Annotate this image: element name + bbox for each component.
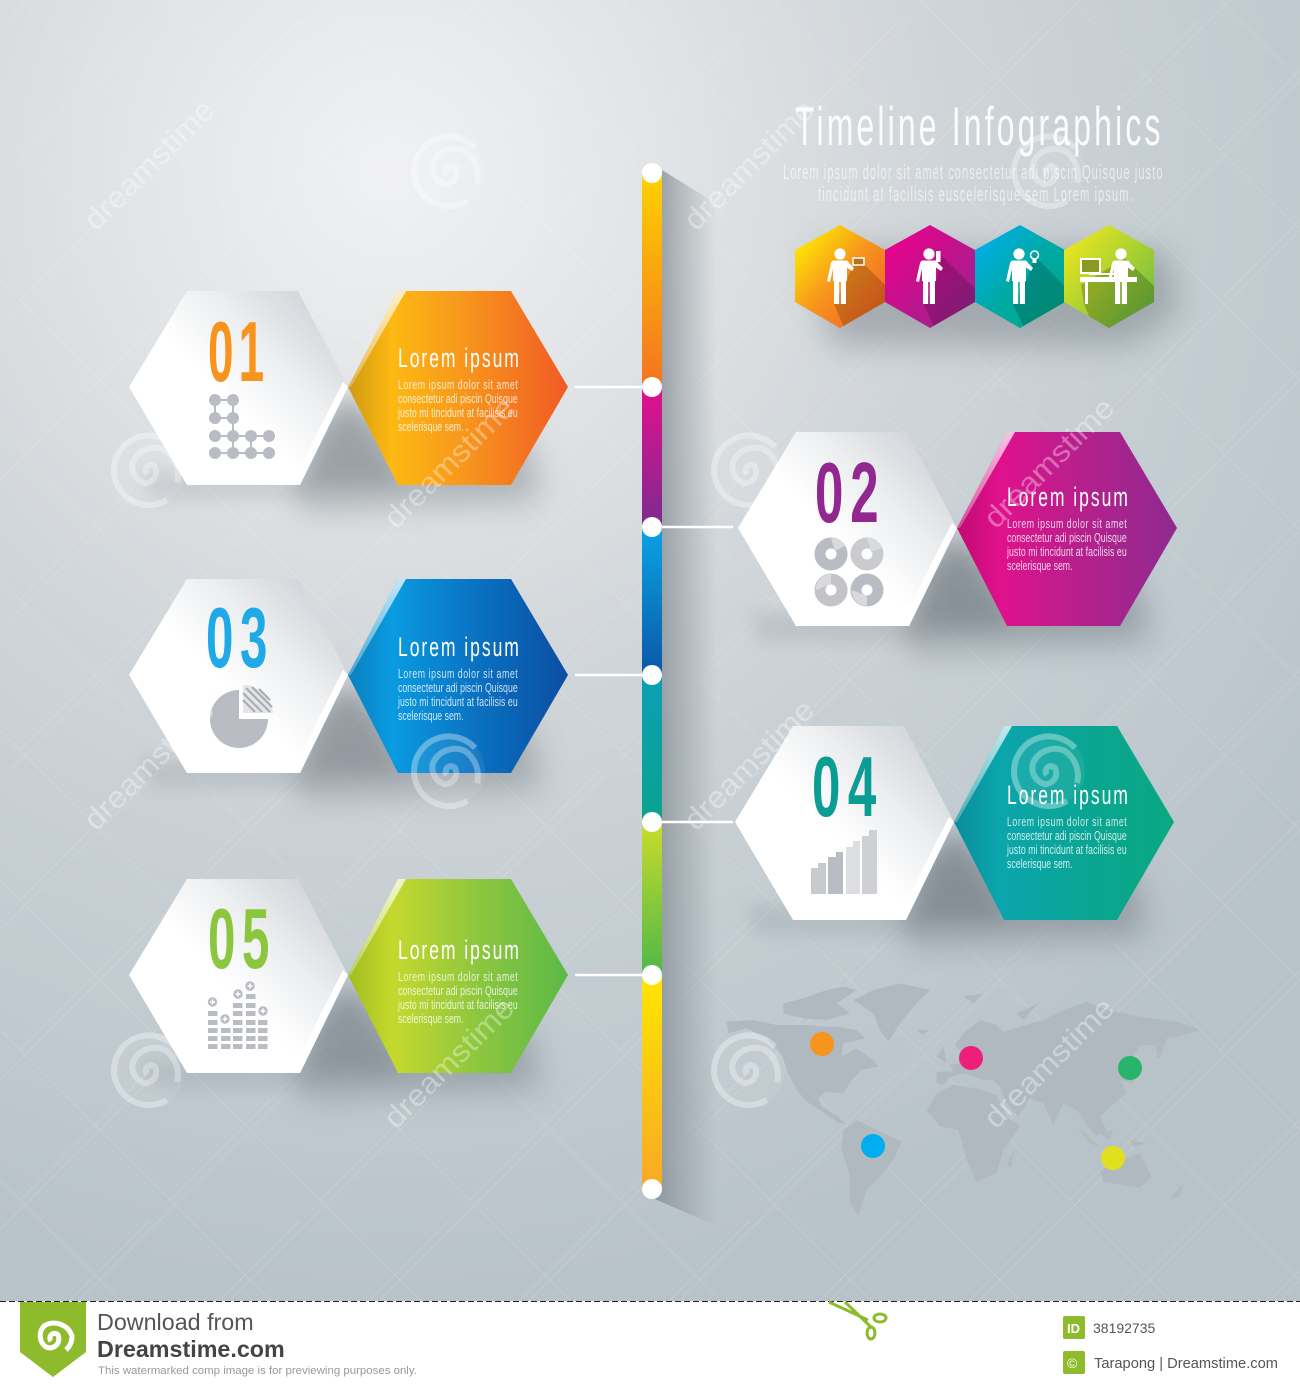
footer download text xyxy=(97,1309,417,1377)
step number 02: 02 xyxy=(815,446,879,540)
icon: rising step bars xyxy=(811,830,877,894)
step 01 text: consectetur adi piscin Quisque xyxy=(398,393,518,406)
step 05 text: justo mi tincidunt at facilisis eu xyxy=(397,999,518,1012)
title: Timeline Infographics xyxy=(795,95,1160,157)
step 02 text: Lorem ipsum dolor sit amet xyxy=(1007,518,1127,531)
icon: green ribbon logo xyxy=(20,1302,86,1377)
id badge and number xyxy=(1063,1316,1156,1339)
author badge and credit: © xyxy=(1067,1355,1078,1371)
panel: step 01 xyxy=(129,291,568,485)
step 05 text xyxy=(397,934,519,1026)
step 03 text: Lorem ipsum dolor sit amet xyxy=(398,668,518,681)
step number 03: 03 xyxy=(206,590,267,685)
footer download text: This watermarked comp image is for previewing purposes only. xyxy=(98,1365,417,1377)
id badge and number: ID xyxy=(1067,1321,1080,1336)
watermarks: dreamstime xyxy=(678,93,821,237)
step 04 text: Lorem ipsum xyxy=(1007,779,1128,810)
step 02 text xyxy=(1006,481,1128,573)
author badge and credit xyxy=(1063,1351,1278,1374)
step 04 text: Lorem ipsum dolor sit amet xyxy=(1007,816,1127,829)
small hexagon row shadow xyxy=(810,250,1180,345)
id badge and number: 38192735 xyxy=(1093,1320,1156,1336)
intro text: tincidunt at facilisis euscelerisque sem Lorem ipsum. xyxy=(818,184,1133,206)
step 05 text: scelerisque sem. xyxy=(398,1013,464,1026)
step 03 text: justo mi tincidunt at facilisis eu xyxy=(397,696,518,709)
icon: pie chart xyxy=(210,685,273,748)
step 03 text xyxy=(397,631,519,723)
step 04 text: scelerisque sem. xyxy=(1007,858,1073,871)
intro text: Lorem ipsum dolor sit amet consectetur adi piscin Quisque justo xyxy=(783,162,1163,184)
step 01 text: Lorem ipsum dolor sit amet xyxy=(398,379,518,392)
step 04 text: consectetur adi piscin Quisque xyxy=(1007,830,1127,843)
timeline cast shadow xyxy=(650,170,717,1226)
map markers xyxy=(810,1032,1142,1170)
panel: step 04 xyxy=(735,726,1174,920)
step 02 text: scelerisque sem. xyxy=(1007,560,1073,573)
step 01 text: justo mi tincidunt at facilisis eu xyxy=(397,407,518,420)
step 04 text xyxy=(1006,779,1128,871)
step 02 text: consectetur adi piscin Quisque xyxy=(1007,532,1127,545)
icon: person with laptop xyxy=(795,225,890,330)
footer band xyxy=(0,1301,1300,1390)
step 02 text: Lorem ipsum xyxy=(1007,481,1128,512)
vertical timeline bar xyxy=(642,163,662,1199)
footer download text: Dreamstime.com xyxy=(97,1336,285,1362)
step number 05: 05 xyxy=(208,891,269,986)
panel: step 03 xyxy=(129,579,568,773)
icon: network of nodes xyxy=(210,395,274,458)
watermarks: dreamstime xyxy=(78,93,221,237)
step 03 text: consectetur adi piscin Quisque xyxy=(398,682,518,695)
watermarks: dreamstime xyxy=(678,693,821,837)
author badge and credit: Tarapong | Dreamstime.com xyxy=(1094,1355,1278,1372)
step 03 text: scelerisque sem. xyxy=(398,710,464,723)
intro text xyxy=(783,162,1163,206)
step 05 text: Lorem ipsum dolor sit amet xyxy=(398,971,518,984)
icon: person with light bulb xyxy=(975,225,1070,330)
icon: scissors xyxy=(829,1302,886,1339)
step shadows xyxy=(140,395,1149,1098)
step 05 text: Lorem ipsum xyxy=(398,934,519,965)
icon row: four people hexagons xyxy=(795,225,1160,330)
panel: step 05 xyxy=(129,879,568,1073)
step 03 text: Lorem ipsum xyxy=(398,631,519,662)
step 01 text: Lorem ipsum xyxy=(398,342,519,373)
icon: person on phone xyxy=(885,225,980,330)
icon: person at desk xyxy=(1064,225,1160,330)
watermarks: dreamstime xyxy=(378,991,521,1135)
watermarks xyxy=(78,93,1121,1135)
world map xyxy=(727,983,1200,1215)
step 05 text: consectetur adi piscin Quisque xyxy=(398,985,518,998)
step 01 text xyxy=(397,342,519,434)
step number 04: 04 xyxy=(812,740,876,834)
watermarks: dreamstime xyxy=(978,991,1121,1135)
step 02 text: justo mi tincidunt at facilisis eu xyxy=(1006,546,1127,559)
icon: four donut charts xyxy=(816,538,882,606)
watermarks: dreamstime xyxy=(78,693,221,837)
watermarks: dreamstime xyxy=(978,391,1121,535)
watermarks: dreamstime xyxy=(378,391,521,535)
step number 01: 01 xyxy=(208,305,264,400)
panel: step 02 xyxy=(738,432,1177,626)
icon: equalizer bars xyxy=(208,981,268,1049)
footer download text: Download from xyxy=(97,1309,254,1335)
timeline connectors xyxy=(575,387,733,975)
step 04 text: justo mi tincidunt at facilisis eu xyxy=(1006,844,1127,857)
step 01 text: scelerisque sem. xyxy=(398,421,464,434)
